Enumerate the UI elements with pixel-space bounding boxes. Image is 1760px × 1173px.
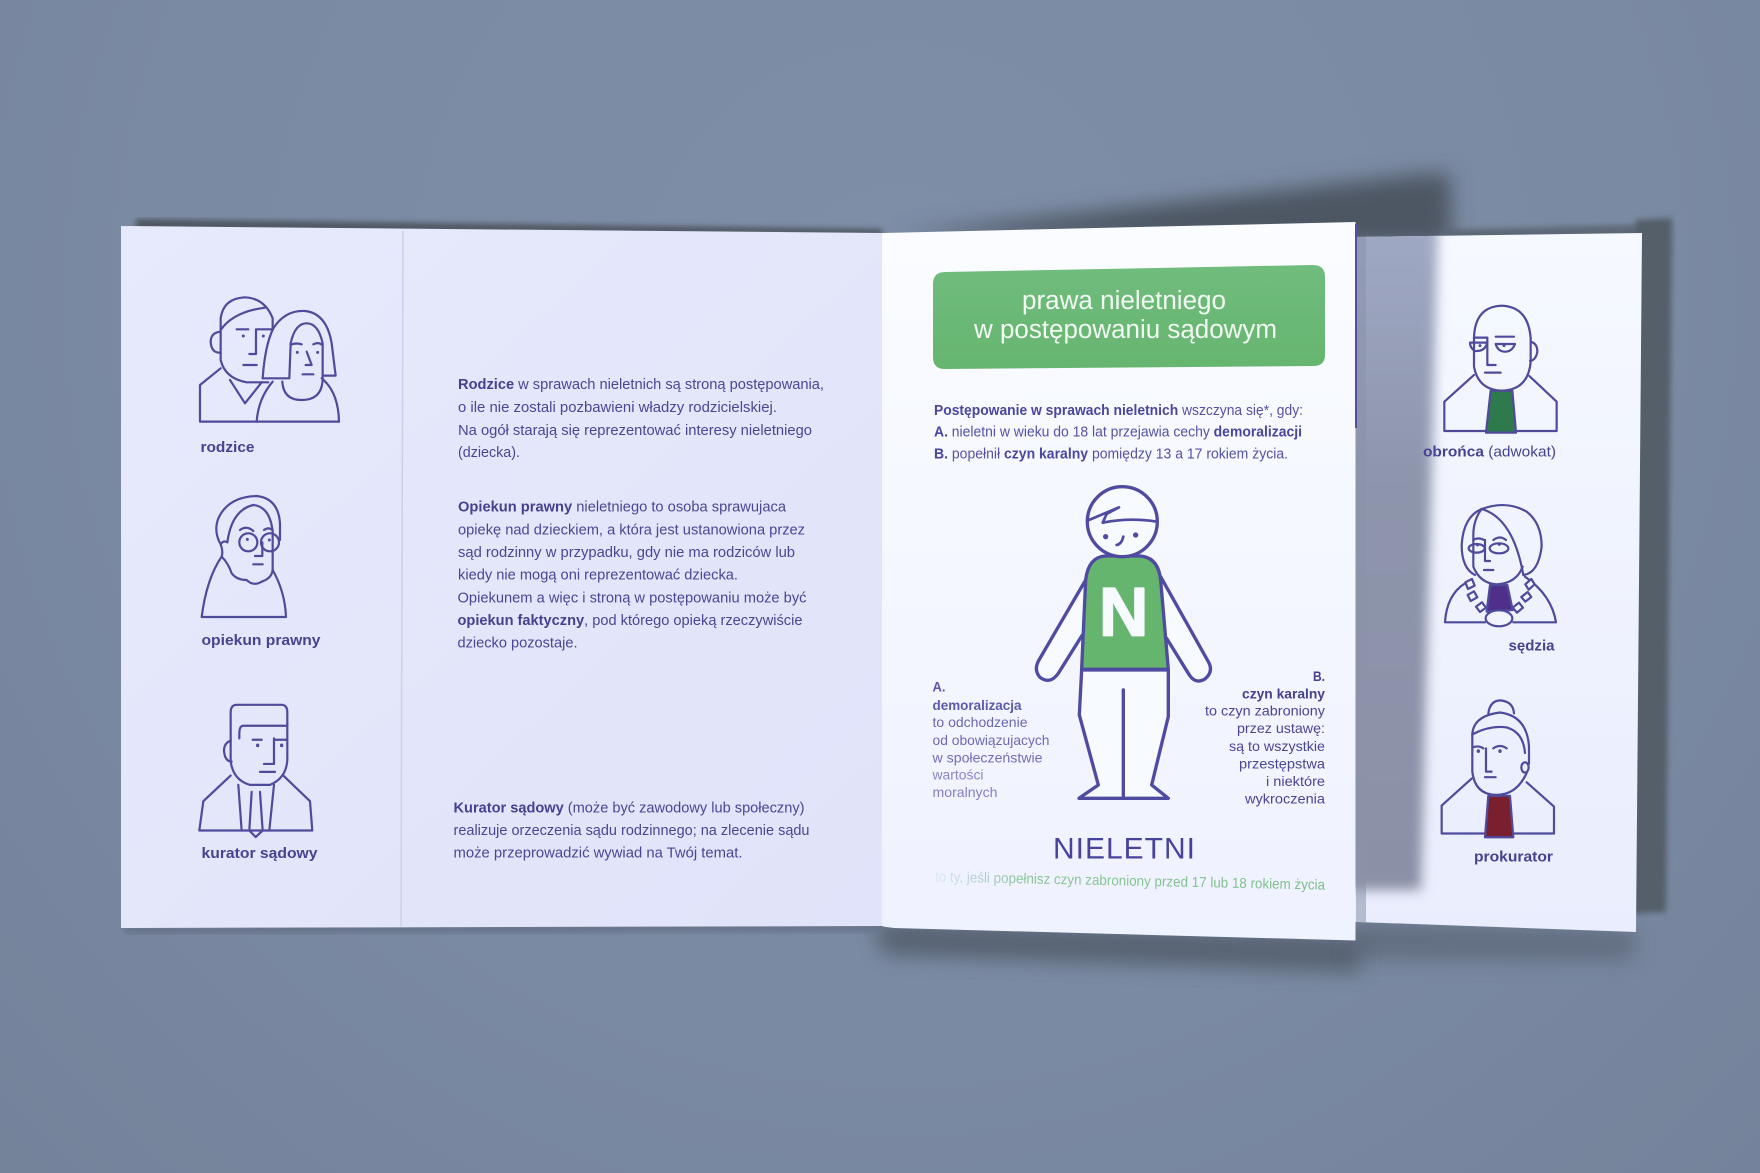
text block: legal guardian: kiedy nie mogą oni reprezentować dziecka. (458, 568, 738, 584)
icon: judge (1445, 505, 1556, 626)
text block: B czyn karalny: przestępstwa (1239, 756, 1325, 772)
footnote: who a minor is: to ty, jeśli popełnisz czyn zabroniony przed 17 lub 18 rokiem życia (935, 870, 1326, 894)
heading box (933, 265, 1325, 369)
text block: legal guardian: Opiekun prawny nieletniego to osoba sprawujaca (458, 500, 787, 516)
text block: court curator: może przeprowadzić wywiad na Twój temat. (454, 846, 742, 862)
cast shadows behind the leaflet (124, 174, 1672, 972)
heading box: w postępowaniu sądowym (973, 316, 1277, 344)
illustration: minor figure with N shirt: N (1099, 575, 1148, 651)
text block: court curator (454, 800, 810, 862)
text block: when proceedings start: A. nieletni w wieku do 18 lat przejawia cechy demoralizacji (934, 424, 1302, 440)
text block: legal guardian (458, 500, 806, 652)
text block: parents: Rodzice w sprawach nieletnich są stroną postępowania, (458, 377, 824, 393)
text block: A demoralizacja: w społeczeństwie (931, 750, 1043, 766)
heading: NIELETNI: NIELETNI (1053, 832, 1195, 866)
text block: B czyn karalny: i niektóre (1266, 773, 1325, 789)
text block: A demoralizacja: A. (932, 678, 946, 694)
icon: legal guardian (202, 496, 286, 617)
shadow cast on the flap (1356, 236, 1446, 922)
text block: when proceedings start: B. popełnił czyn karalny pomiędzy 13 a 17 rokiem życia. (934, 446, 1288, 462)
text block: legal guardian: sąd rodzinny w przypadku, gdy nie ma rodziców lub (458, 545, 795, 561)
heading box: prawa nieletniego (1022, 287, 1226, 315)
text block: legal guardian: opiekę nad dzieckiem, a która jest ustanowiona przez (458, 522, 805, 538)
text block: B czyn karalny: to czyn zabroniony (1205, 702, 1325, 718)
text block: parents (458, 377, 824, 461)
label: kurator sądowy: kurator sądowy (202, 845, 318, 862)
text block: court curator: Kurator sądowy (może być zawodowy lub społeczny) (454, 800, 804, 816)
panel: left inside spread (121, 226, 882, 928)
panel: right page, rights of the minor (882, 222, 1356, 940)
text block: parents: o ile nie zostali pozbawieni władzy rodzicielskiej. (458, 400, 777, 416)
text block: A demoralizacja: moralnych (932, 784, 998, 800)
icon: court curator (199, 705, 312, 837)
label: rodzice: rodzice (200, 439, 254, 456)
text block: B czyn karalny: są to wszystkie (1229, 738, 1325, 754)
text block: B czyn karalny (1205, 668, 1325, 806)
illustration: minor figure with N shirt (1036, 487, 1210, 798)
text block: court curator: realizuje orzeczenia sądu rodzinnego; na zlecenie sądu (454, 823, 810, 839)
label: prokurator: prokurator (1474, 848, 1553, 866)
text block: legal guardian: opiekun faktyczny, pod którego opieką rzeczywiście (458, 613, 802, 629)
icon: parents (200, 297, 339, 422)
text block: parents: Na ogół starają się reprezentować interesy nieletniego (458, 423, 812, 439)
panel: right flap with roles (1330, 220, 1642, 932)
text block: legal guardian: Opiekunem a więc i stroną w postępowaniu może być (458, 590, 806, 606)
text block: parents: (dziecka). (458, 445, 520, 461)
text block: A demoralizacja: to odchodzenie (932, 714, 1028, 730)
text block: A demoralizacja: od obowiązujacych (932, 732, 1050, 748)
icon: prosecutor (1442, 700, 1554, 837)
text block: A demoralizacja: wartości (932, 766, 984, 782)
text block: legal guardian: dziecko pozostaje. (458, 636, 578, 652)
text block: B czyn karalny: B. (1313, 668, 1325, 684)
text block: when proceedings start: Postępowanie w sprawach nieletnich wszczyna się*, gdy: (934, 403, 1303, 419)
text block: when proceedings start (934, 403, 1303, 462)
text block: A demoralizacja: demoralizacja (932, 697, 1022, 713)
label: opiekun prawny: opiekun prawny (202, 632, 321, 649)
icon: defender (1444, 306, 1557, 433)
text block: B czyn karalny: czyn karalny (1242, 686, 1325, 702)
text block: A demoralizacja (931, 678, 1050, 800)
text block: B czyn karalny: przez ustawę: (1237, 720, 1325, 736)
label: obrońca (adwokat): obrońca (adwokat) (1423, 444, 1556, 460)
label: sędzia: sędzia (1508, 638, 1555, 654)
text block: B czyn karalny: wykroczenia (1244, 790, 1325, 806)
